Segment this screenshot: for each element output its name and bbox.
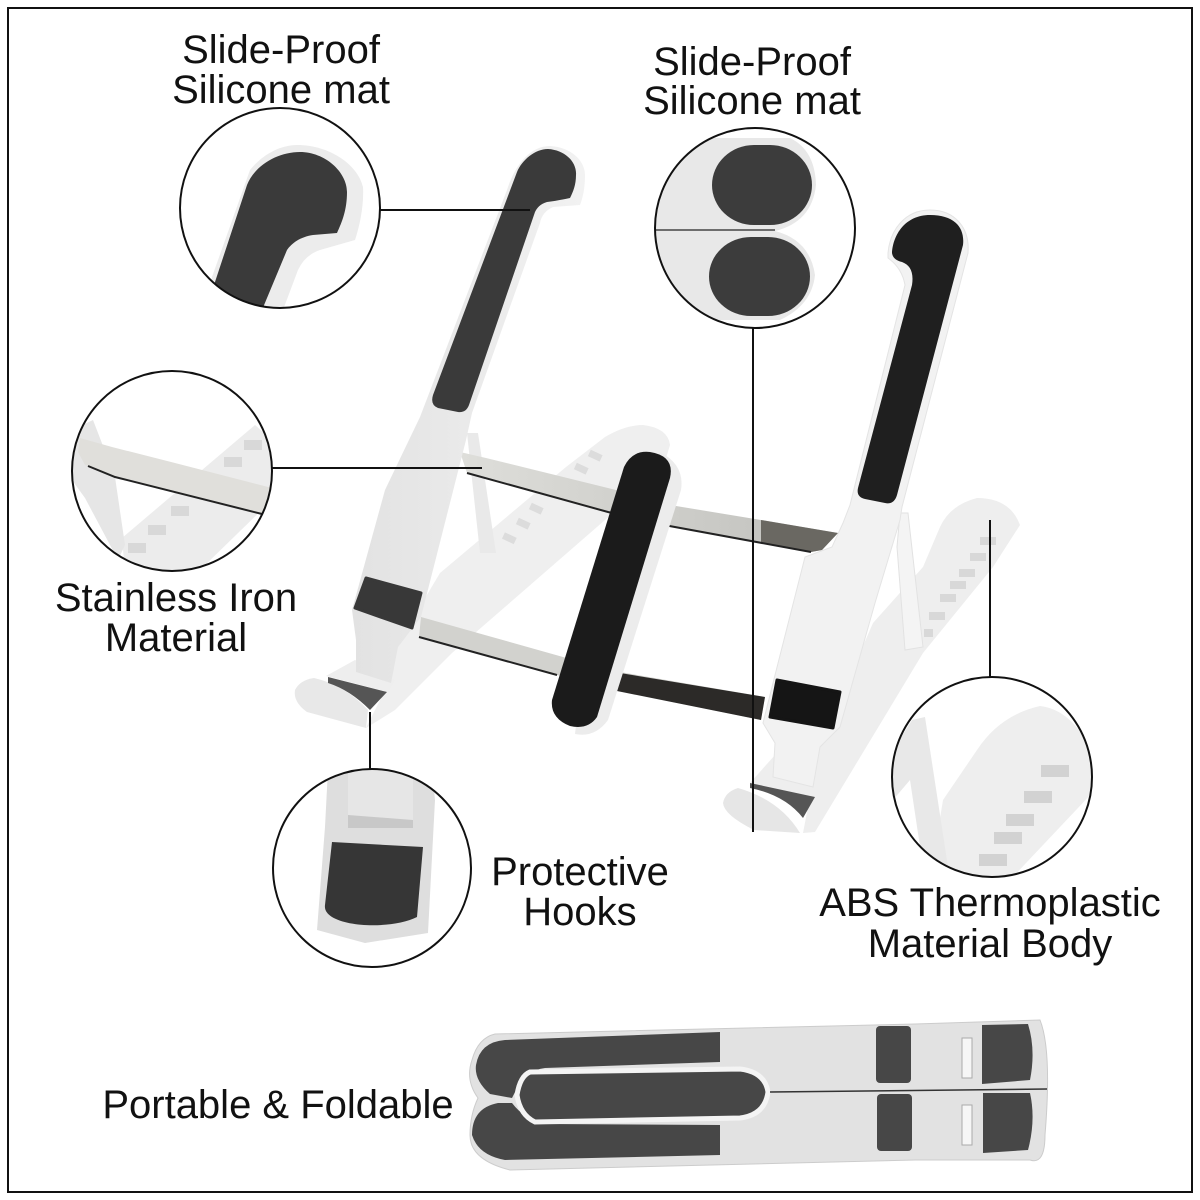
circle outline 1 (180, 108, 380, 308)
left arm (352, 146, 585, 683)
callout circle: stainless iron (73, 420, 271, 570)
label: protective hooks: Protective (491, 850, 669, 894)
label: protective hooks: Hooks (523, 890, 637, 934)
centre rest (575, 452, 682, 735)
label: ABS: Material Body (868, 922, 1112, 966)
label: stainless iron: Material (105, 616, 247, 660)
label: stainless iron: Stainless Iron (55, 576, 297, 620)
right foot (723, 788, 800, 833)
folded stand (470, 1020, 1048, 1170)
callout lines (272, 210, 990, 832)
label: portable and foldable: Portable & Foldable (102, 1083, 454, 1127)
left lower pad (355, 578, 421, 628)
callout circle: ABS body (893, 706, 1091, 876)
left arm silicone pad (432, 149, 576, 412)
label: slide-proof left: Silicone mat (172, 68, 390, 112)
callout circle: top left silicone mat (212, 145, 363, 307)
callout circle: protective hooks (317, 770, 435, 943)
circle outline 4 (273, 769, 471, 967)
laptop stand product photo (295, 146, 1020, 833)
callout circle: top centre silicone mat (656, 138, 816, 327)
left foot (295, 678, 368, 728)
stainless bars (460, 452, 838, 552)
folded stand pads (476, 1032, 720, 1098)
label: ABS: ABS Thermoplastic (819, 881, 1161, 925)
right foot base (750, 755, 815, 797)
support struts (467, 433, 496, 553)
label: slide-proof right: Silicone mat (643, 79, 861, 123)
rear left leg (366, 425, 670, 728)
circle outline 5 (892, 677, 1092, 877)
circle outline 2 (655, 128, 855, 328)
rear right leg (803, 498, 1020, 833)
right lower pad (770, 680, 840, 728)
left foot base (326, 660, 395, 692)
label: slide-proof left: Slide-Proof (182, 28, 380, 72)
label: slide-proof right: Slide-Proof (653, 40, 851, 84)
right arm (763, 210, 968, 787)
circle outline 3 (72, 371, 272, 571)
right arm silicone pad (858, 215, 963, 503)
